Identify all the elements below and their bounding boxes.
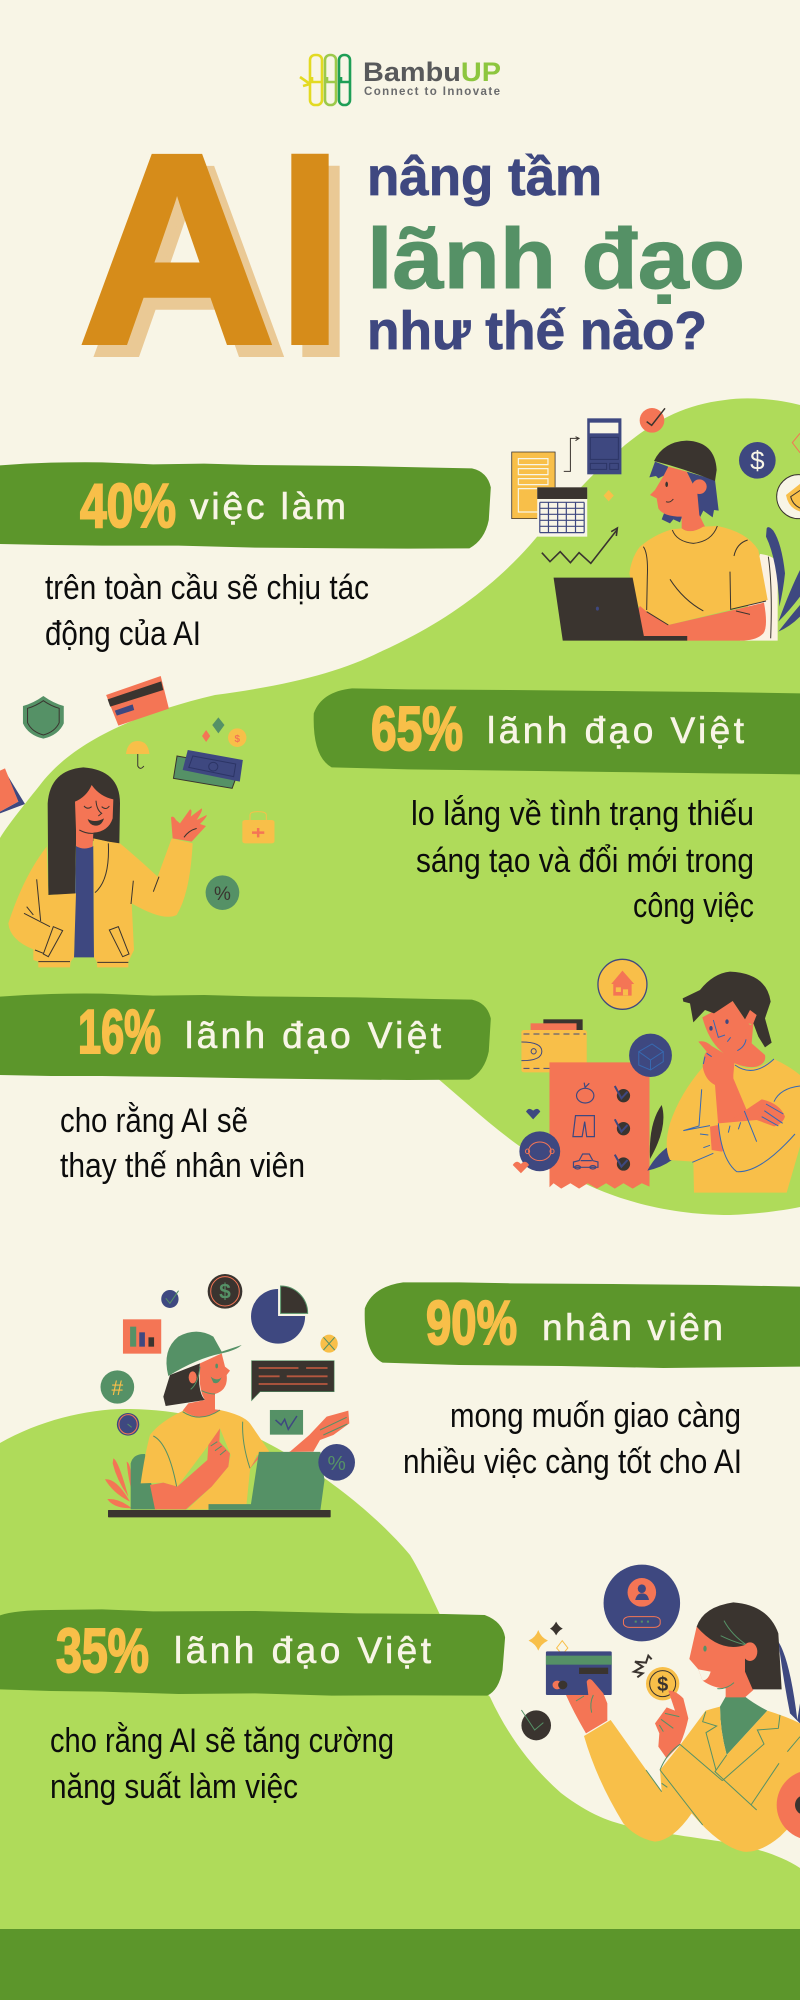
person: cap	[166, 1332, 242, 1376]
icon: check badge	[640, 408, 665, 433]
icon: wallet	[521, 1019, 587, 1072]
stat: 90% nhân viên	[426, 1289, 723, 1358]
icon: calendar	[537, 487, 587, 537]
icon: heart coral	[513, 1162, 529, 1173]
text: 65% description: công việc	[633, 887, 754, 925]
logo wordmark: BambuUP	[363, 57, 501, 87]
background blob: lower green wave	[0, 1409, 800, 1930]
icon: sparkles	[529, 1630, 548, 1651]
icon: banknotes	[173, 750, 243, 788]
title: AI: A	[91, 111, 287, 412]
stat: 65% lãnh đạo Việt: 65%	[371, 695, 463, 764]
text: 65% description	[411, 795, 754, 925]
banner: 65%	[314, 688, 800, 774]
person: pointing hand	[655, 1691, 688, 1758]
icon: diamond outline	[792, 433, 800, 453]
stat: 16% lãnh đạo Việt: lãnh đạo Việt	[185, 1015, 442, 1056]
icon: book	[0, 768, 25, 813]
footer band	[0, 1929, 800, 2000]
person: folded forearm	[710, 1099, 795, 1172]
illustration: woman waving	[0, 767, 207, 967]
icon: first aid kit	[242, 812, 274, 843]
icon: shield coin	[777, 475, 800, 519]
icon: credit card	[106, 676, 169, 726]
text: 90% description: mong muốn giao càng	[450, 1397, 741, 1435]
text: 16% description: cho rằng AI sẽ	[60, 1102, 248, 1140]
text: 35% description: cho rằng AI sẽ tăng cường	[50, 1722, 394, 1760]
icon: dollar badge: $	[219, 1281, 231, 1304]
title: AI: I	[285, 105, 357, 416]
illustration: man thinking	[647, 972, 800, 1193]
person: ear	[692, 479, 707, 494]
icon: percent badge	[206, 875, 239, 910]
icon: umbrella	[126, 741, 149, 768]
person: eye and smile	[666, 499, 673, 502]
person: shirt	[667, 1059, 800, 1193]
hand holding card	[566, 1679, 607, 1733]
icon: form document	[512, 452, 555, 519]
icon: coin: $	[234, 734, 240, 745]
text: 65% description: lo lắng về tình trạng thiếu	[411, 795, 754, 833]
icon: heart navy	[526, 1109, 540, 1119]
icon: sparkle	[604, 490, 614, 501]
logo: BambuUP	[300, 55, 501, 105]
icon: dollar coin: $	[750, 446, 765, 476]
person: face and neck	[650, 467, 705, 531]
laptop	[554, 578, 687, 641]
stat: 16% lãnh đạo Việt: 16%	[78, 998, 161, 1067]
icon: clock	[117, 1413, 139, 1436]
icon: dark check badge	[521, 1710, 551, 1740]
text: 90% description: nhiều việc càng tốt cho AI	[403, 1443, 742, 1481]
icon: navy box badge	[629, 1034, 672, 1077]
illustration: man at laptop	[629, 408, 800, 641]
person: hair	[163, 1363, 205, 1406]
background blob: upper green wave	[0, 398, 800, 1215]
icon: close badge	[320, 1335, 338, 1353]
stat: 16% lãnh đạo Việt	[78, 998, 442, 1067]
icon: bent arrow	[564, 437, 579, 471]
person: t-shirt	[629, 526, 768, 625]
text: 35% description: năng suất làm việc	[50, 1768, 298, 1806]
illustration: person at laptop with cap	[105, 1332, 355, 1517]
stat: 65% lãnh đạo Việt: lãnh đạo Việt	[487, 710, 745, 751]
illustration: chart icons beside person	[101, 1274, 338, 1436]
plant	[105, 1458, 132, 1508]
text: 40% description: động của AI	[45, 615, 201, 653]
icon: clipped coral badge	[777, 1770, 800, 1840]
title: nâng tầm lãnh đạo như thế nào?	[367, 147, 745, 361]
desk	[108, 1510, 331, 1517]
icon: bamboo stalks	[300, 55, 350, 105]
text: 90% description	[403, 1397, 742, 1481]
icon: trend card	[270, 1410, 303, 1435]
ponytail	[778, 1642, 800, 1723]
receipt	[549, 1062, 649, 1189]
title: AI: A	[79, 99, 275, 400]
icon: squiggle	[634, 1656, 652, 1677]
title: AI: I	[274, 93, 346, 404]
icon: profile badge	[604, 1565, 680, 1641]
icon: percent badge: %	[214, 884, 231, 905]
text: 40% description	[45, 569, 369, 653]
text: 65% description: sáng tạo và đổi mới trong	[416, 842, 754, 880]
person: face	[75, 785, 113, 849]
person: hair	[48, 767, 120, 895]
illustration: shopping icons beside man	[513, 959, 672, 1189]
stat: 40% việc làm: 40%	[80, 472, 176, 541]
chair	[131, 1454, 157, 1509]
text: 16% description: thay thế nhân viên	[60, 1147, 305, 1185]
stat: 35% lãnh đạo Việt	[56, 1617, 432, 1686]
speech bubble	[252, 1361, 334, 1401]
person: face and neck	[702, 1001, 765, 1067]
person: face	[689, 1627, 753, 1697]
person: hair	[697, 1602, 782, 1689]
stat: 65% lãnh đạo Việt	[371, 695, 745, 764]
icon: baby badge	[519, 1131, 560, 1171]
stat: 40% việc làm	[80, 472, 346, 541]
banner: 16%	[0, 994, 491, 1080]
person: arm	[633, 603, 766, 641]
person: shirt	[74, 846, 94, 957]
icon: shield	[23, 696, 64, 739]
banner: 40%	[0, 462, 491, 549]
stat: 90% nhân viên: nhân viên	[542, 1307, 723, 1348]
person: ear	[744, 1009, 759, 1024]
person: hair	[683, 972, 772, 1047]
stat: 40% việc làm: việc làm	[190, 486, 346, 527]
icon: credit card	[546, 1651, 612, 1695]
icon: hash badge: #	[112, 1377, 124, 1400]
illustration: payment icons	[521, 1565, 680, 1740]
icon: sparkles	[212, 717, 224, 733]
person: ear	[743, 1642, 757, 1661]
person: turtleneck	[720, 1697, 767, 1755]
logo tagline: Connect to Innovate	[364, 86, 500, 98]
banner: 90%	[365, 1282, 800, 1368]
text: 35% description	[50, 1722, 394, 1806]
stat: 90% nhân viên: 90%	[426, 1289, 517, 1358]
icon: coin: $	[657, 1674, 668, 1696]
banner: 35%	[0, 1609, 505, 1696]
stat: 35% lãnh đạo Việt: lãnh đạo Việt	[174, 1630, 432, 1671]
person: raised hand	[250, 1411, 349, 1468]
title: nâng tầm lãnh đạo như thế nào?: như thế nào?	[367, 301, 707, 361]
icon: dollar coin	[739, 442, 776, 479]
icon: calculator	[587, 418, 621, 474]
text: 40% description: trên toàn cầu sẽ chịu tác	[45, 569, 369, 607]
plant	[766, 527, 800, 632]
chair	[740, 554, 778, 641]
chart: bars	[123, 1319, 161, 1354]
person: facial features	[709, 1019, 774, 1070]
stat: 35% lãnh đạo Việt: 35%	[56, 1617, 149, 1686]
icon: percent badge: %	[327, 1452, 346, 1475]
person: t-shirt	[141, 1410, 269, 1509]
icon: zigzag growth arrow	[542, 528, 617, 563]
title: AI	[79, 93, 357, 416]
text: 16% description	[60, 1102, 305, 1185]
icon: hash badge	[101, 1370, 134, 1404]
illustration: finance icons beside woman	[23, 676, 274, 910]
icon: dollar badge	[208, 1274, 242, 1309]
icon: coin	[228, 728, 246, 747]
person: arm and pointing hand	[150, 1428, 230, 1509]
person: cap	[654, 441, 717, 481]
illustration: woman with card and coin	[566, 1602, 800, 1852]
person: jacket	[8, 838, 193, 967]
person: blue hair	[649, 462, 719, 523]
plant leaves	[650, 1105, 663, 1159]
person: hand	[171, 808, 207, 842]
chart: pie	[251, 1286, 308, 1344]
person: sleeve lines	[683, 1053, 800, 1172]
person: jacket	[584, 1707, 800, 1852]
person: raised arm and hand	[698, 1041, 757, 1127]
title: nâng tầm lãnh đạo như thế nào?: lãnh đạo	[367, 212, 745, 307]
icon: house badge	[598, 959, 647, 1009]
title: nâng tầm lãnh đạo như thế nào?: nâng tầm	[367, 147, 602, 207]
icon: coin	[646, 1667, 679, 1700]
laptop	[209, 1452, 324, 1509]
person: face and neck	[183, 1353, 230, 1417]
illustration: finance icons beside man	[512, 418, 621, 563]
icon: check badge	[161, 1290, 179, 1308]
icon: percent badge	[318, 1444, 355, 1481]
